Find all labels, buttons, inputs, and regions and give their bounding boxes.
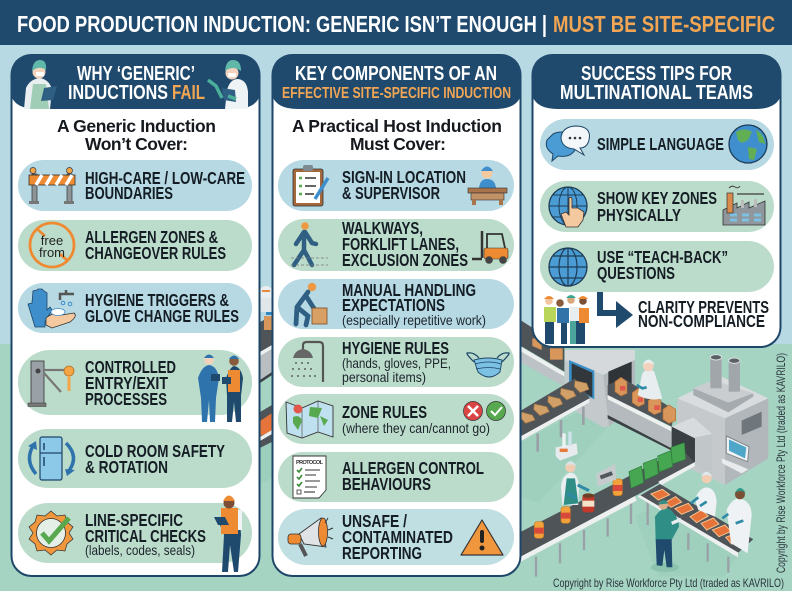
icon: glove and soap — [28, 289, 75, 328]
icon: protocol document: PROTOCOL — [296, 460, 324, 466]
item: zone rules — [278, 394, 514, 444]
conveyor: upper left cartons — [505, 310, 564, 387]
panel: key components — [272, 55, 521, 576]
item: allergen control: BEHAVIOURS — [342, 474, 431, 494]
machine: small tunnel — [672, 417, 712, 477]
item: hygiene rules: personal items) — [342, 369, 426, 385]
item: high-care boundaries: BOUNDARIES — [85, 183, 173, 203]
figure: multinational team — [544, 295, 589, 344]
tip: key zones — [540, 181, 774, 232]
item: manual handling — [278, 279, 514, 329]
header: success tips: MULTINATIONAL TEAMS — [560, 82, 753, 104]
subheading: generic induction: A Generic Induction — [57, 116, 216, 136]
icon: globe and pointing hand — [549, 187, 587, 227]
icon: globe — [549, 248, 587, 286]
item: hygiene rules: HYGIENE RULES — [342, 338, 449, 358]
header: key components: EFFECTIVE SITE-SPECIFIC INDUCTION — [282, 85, 511, 102]
icon: chat bubbles — [546, 126, 589, 161]
callout: clarity prevents non-compliance — [638, 297, 769, 331]
illustration: food production line — [505, 310, 768, 577]
control box — [596, 464, 616, 487]
tip: simple language: SIMPLE LANGUAGE — [597, 134, 724, 154]
item: reporting: REPORTING — [342, 543, 422, 563]
header: why generic — [11, 55, 260, 109]
icon: shower — [292, 342, 323, 382]
item: controlled entry: ENTRY/EXIT — [85, 373, 168, 393]
item: sign-in: & SUPERVISOR — [342, 183, 440, 203]
item: allergen control: ALLERGEN CONTROL — [342, 458, 484, 478]
conveyor: biscuits into tunnel — [505, 378, 590, 452]
item: reporting: UNSAFE / — [342, 511, 407, 531]
item: sign-in — [278, 160, 514, 211]
panel: success tips — [532, 55, 781, 347]
tip: key zones: PHYSICALLY — [597, 205, 681, 225]
conveyor: cartons to packing — [608, 377, 676, 451]
item: allergen zones: CHANGEOVER RULES — [85, 243, 226, 263]
header: key components: KEY COMPONENTS OF AN — [295, 63, 497, 85]
item: manual handling: MANUAL HANDLING — [342, 280, 476, 300]
header: success tips — [532, 55, 781, 109]
item: line-specific checks: LINE-SPECIFIC — [85, 510, 183, 530]
icon: worker with clipboard — [214, 496, 242, 572]
title bar — [0, 0, 792, 45]
background gap detail: left column conveyor — [259, 286, 273, 484]
item: controlled entry: PROCESSES — [85, 389, 167, 409]
icon: free from — [30, 223, 74, 267]
item: allergen zones: ALLERGEN ZONES & — [85, 227, 218, 247]
tip: key zones: SHOW KEY ZONES — [597, 188, 717, 208]
icon: world map — [286, 401, 333, 438]
worker: tray operator one — [691, 472, 717, 517]
title bar: FOOD PRODUCTION INDUCTION: GENERIC ISN’T ENOUGH | — [17, 11, 547, 37]
worker: line operator — [561, 461, 589, 505]
icon: face mask — [467, 353, 509, 377]
item: line-specific checks: (labels, codes, seals) — [85, 542, 195, 558]
icon: fridge with arrows — [28, 437, 75, 480]
item: walkways: WALKWAYS, — [342, 218, 423, 238]
icon: free from: free — [41, 233, 63, 248]
item: hygiene triggers — [18, 283, 252, 333]
subheading: practical host induction: A Practical Host Induction — [292, 116, 502, 136]
icon: protocol document — [293, 456, 326, 498]
item: reporting: CONTAMINATED — [342, 527, 453, 547]
item: controlled entry — [18, 350, 252, 422]
dispenser — [556, 432, 578, 461]
item: manual handling: EXPECTATIONS — [342, 295, 445, 315]
header: why generic: WHY ‘GENERIC’ — [77, 63, 195, 85]
icon: person lifting box — [296, 283, 327, 325]
header: success tips: SUCCESS TIPS FOR — [581, 63, 732, 85]
icon: earth globe — [729, 125, 767, 163]
figure: worker with tablet — [24, 60, 57, 109]
icon: factory — [723, 186, 765, 225]
header: why generic: INDUCTIONS — [68, 82, 168, 104]
item: walkways: EXCLUSION ZONES — [342, 250, 468, 270]
icon: walking person — [291, 222, 328, 265]
item: cold room safety: & ROTATION — [85, 457, 168, 477]
item: allergen zones — [18, 220, 252, 271]
tip: teach-back — [540, 241, 774, 292]
icon: megaphone — [288, 518, 333, 556]
item: sign-in: SIGN-IN LOCATION — [342, 167, 466, 187]
icon: barrier — [29, 168, 75, 204]
item: line-specific checks — [18, 496, 252, 572]
item: cold room safety: COLD ROOM SAFETY — [85, 441, 225, 461]
item: allergen control — [278, 452, 514, 502]
item: line-specific checks: CRITICAL CHECKS — [85, 526, 206, 546]
copyright: vertical: Copyright by Rise Workforce Pty Ltd (traded as KAVRILO) — [774, 353, 788, 573]
icon: checked badge — [29, 511, 73, 555]
item: high-care boundaries: HIGH-CARE / LOW-CARE — [85, 168, 245, 188]
item: hygiene triggers: GLOVE CHANGE RULES — [85, 306, 239, 326]
item: manual handling: (especially repetitive work) — [342, 312, 486, 328]
item: walkways — [278, 218, 514, 271]
item: walkways: FORKLIFT LANES, — [342, 234, 459, 254]
arrow: teach-back to clarity — [600, 292, 633, 328]
item: hygiene triggers: HYGIENE TRIGGERS & — [85, 290, 229, 310]
panel: why generic inductions fail — [11, 55, 260, 576]
icon: supervisor at desk — [468, 166, 507, 205]
worker: supervisor — [651, 500, 681, 572]
icon: clipboard — [293, 165, 328, 206]
machine: large cooker — [677, 355, 768, 485]
subheading: generic induction — [57, 116, 216, 154]
item: cold room safety — [18, 429, 252, 488]
conveyor: main line — [505, 443, 695, 577]
item: controlled entry: CONTROLLED — [85, 357, 176, 377]
item: hygiene rules — [278, 337, 514, 387]
tip: teach-back: USE “TEACH-BACK” — [597, 247, 728, 267]
subheading: practical host induction: Must Cover: — [350, 134, 446, 154]
tip: simple language — [540, 119, 774, 170]
item: zone rules: (where they can/cannot go) — [342, 420, 490, 436]
item: reporting — [278, 509, 514, 565]
header: why generic: FAIL — [172, 82, 205, 104]
header: key components — [272, 55, 521, 109]
machine: tunnel one — [565, 350, 635, 427]
subheading: generic induction: Won’t Cover: — [85, 134, 188, 154]
item: hygiene rules: (hands, gloves, PPE, — [342, 355, 451, 371]
tip: teach-back: QUESTIONS — [597, 263, 675, 283]
item: high-care boundaries — [18, 160, 252, 211]
figure: worker with gloves — [208, 60, 248, 109]
worker: packing — [637, 359, 662, 399]
icon: forklift — [472, 231, 508, 264]
worker: tray operator two — [722, 488, 752, 553]
icon: free from: from — [39, 245, 65, 260]
icon: cross and check — [464, 402, 506, 420]
item: zone rules: ZONE RULES — [342, 402, 427, 422]
icon: two workers — [198, 354, 243, 422]
icon: warning triangle — [461, 520, 503, 555]
icon: turnstile and key — [28, 361, 74, 406]
conveyor: trays — [638, 484, 753, 573]
subheading: practical host induction — [292, 116, 502, 154]
